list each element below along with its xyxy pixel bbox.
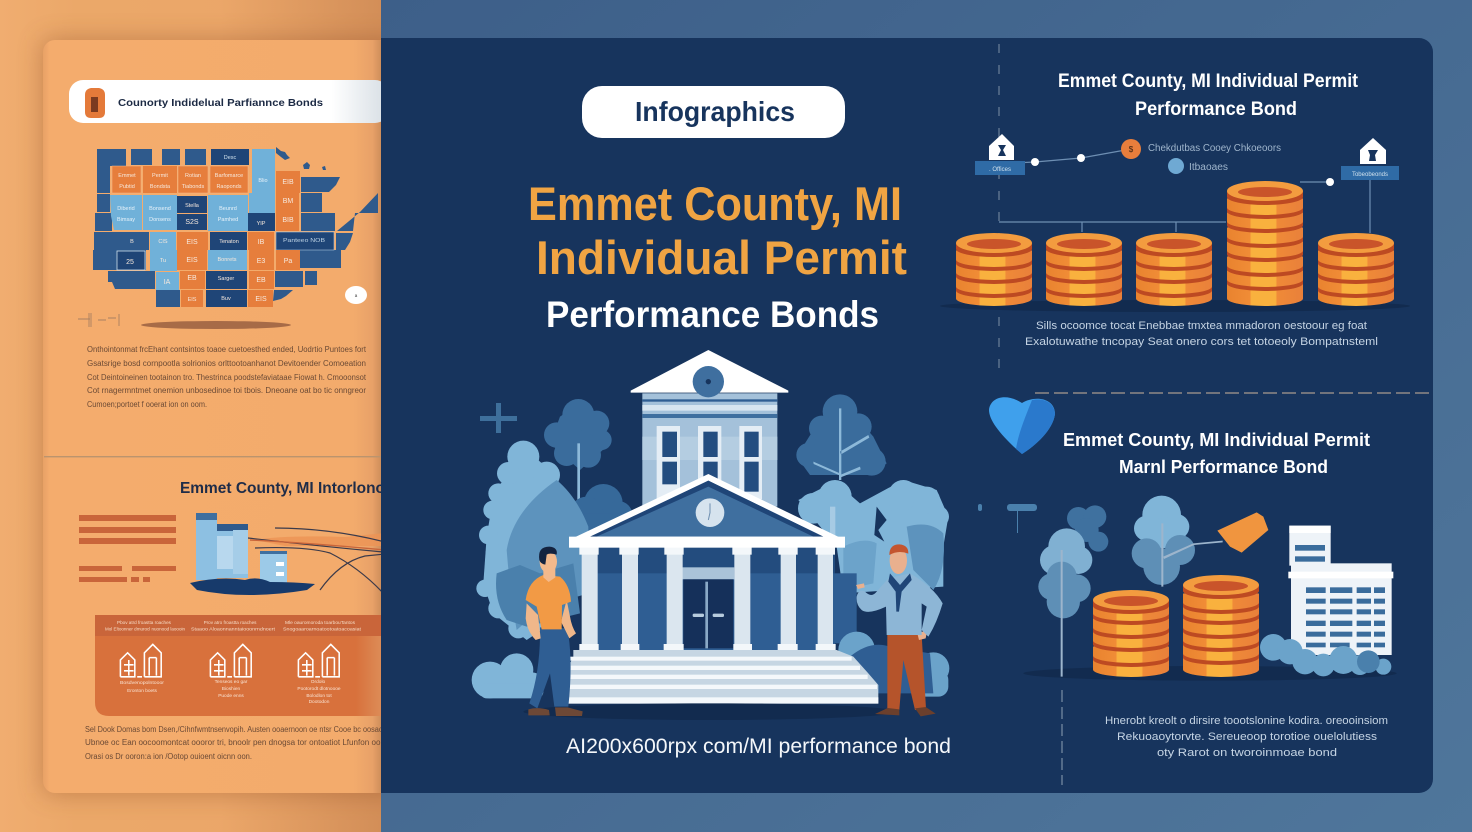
tree: right foreground: [798, 480, 949, 643]
paragraph: lower left: [85, 725, 386, 761]
chart: coin stacks upper: [940, 181, 1410, 312]
door: [682, 567, 734, 648]
map cell labels: BM: [283, 198, 293, 205]
table header text: [105, 620, 362, 632]
body text: lower right: oty Rarot on tworoinmoae bond: [1157, 747, 1337, 759]
map cell labels: IA: [164, 279, 171, 286]
list bars: [79, 515, 176, 582]
table body text: Dootodon: [309, 699, 330, 705]
paragraph: lower left: Ubnoe oc Ean oocoomontcat oooror tri, bnoolr pen dnogsa tor ontoatiot Lfunfon oon: [85, 738, 385, 747]
badge: Infographics pill: [582, 86, 845, 138]
table body text: Eronton boets: [127, 688, 158, 694]
heading: upper right: Emmet County, MI Individual Permit: [1058, 71, 1359, 92]
map cell labels: Bondsta: [150, 184, 171, 190]
body text: lower right: [1105, 715, 1388, 759]
illustration: buildings with curves: [190, 513, 385, 595]
body text: upper right: Exalotuwathe tncopay Seat onero cors tet totoeoly Bompatnsteml: [1025, 336, 1378, 348]
paragraph: upper left: Gsatsrige bosd cornpootla solrionios orlttootoanhanot Devitoender Comoeation: [87, 359, 366, 368]
map cell labels: Tenaton: [219, 239, 239, 245]
icon: house right: Tobeobeonds: [1352, 172, 1388, 178]
map shadow: [141, 321, 291, 329]
section heading: Emmet County, MI Intorlono: [180, 480, 385, 497]
table body text: Tenseos eo gar: [215, 679, 248, 685]
steps: [565, 650, 878, 704]
chart: coin stacks lower: [1093, 575, 1259, 677]
map cell labels: 25: [126, 259, 134, 266]
heading: lower right: [1063, 429, 1370, 477]
map cell labels: Sarger: [218, 276, 234, 282]
map cell labels: [117, 155, 325, 303]
heading: upper right: [1058, 71, 1359, 120]
icon: door badge: [85, 88, 105, 118]
icon: house left: [975, 134, 1025, 175]
paragraph: upper left: Cumoen;portoet f ooerat ion on oom.: [87, 400, 207, 409]
map cell labels: Bonsend: [149, 206, 171, 212]
table header text: Staaoo Aloaonnanntaiooonrndnoert: [191, 626, 276, 632]
price tag: [1217, 512, 1268, 553]
main pediment: [569, 474, 845, 540]
map cell labels: E3: [257, 258, 265, 265]
map cell labels: EIS: [186, 257, 198, 264]
map cell labels: BIB: [282, 217, 294, 224]
legend item orange: [1121, 139, 1281, 159]
ground shadow: [523, 703, 897, 720]
person: right in blue jacket: [856, 544, 943, 716]
table header text: Prov atro froastta roaches: [204, 620, 257, 625]
paragraph: upper left: Cot Deintoineinen tootainon tro. Thestrinca poodstefaviataae Fiowat h. Cmooonsot: [87, 373, 367, 382]
heading: lower right: Marnl Performance Bond: [1119, 456, 1328, 477]
map cell labels: Desc: [224, 155, 237, 161]
map cell labels: EIB: [282, 179, 294, 186]
illustration: lower right scene: [1023, 496, 1397, 681]
body text: upper right: Sills ocoomce tocat Enebbae tmxtea mmadoron oestoour eg foat: [1036, 320, 1367, 332]
table header text: Snogoaaroarnoatootoatoacoasiat: [283, 626, 362, 632]
table body text: Bolodlon tot: [306, 693, 332, 699]
map cell labels: EIS: [188, 297, 197, 303]
map cell labels: EIS: [186, 239, 198, 246]
table body text: Bioshien: [222, 686, 241, 692]
body text: upper right: [1025, 320, 1378, 348]
paragraph: upper left: Cot rnagermntmet onemion unbosedinoe toi tbois. Dneoane oat bo tic onngreor: [87, 386, 366, 395]
person: left in orange shirt: [526, 547, 583, 716]
map cell labels: IB: [258, 239, 265, 246]
map cell labels: CIS: [158, 239, 168, 245]
badge: Infographics pill: Infographics: [635, 96, 795, 127]
tower windows: [657, 426, 762, 499]
vertical dashed rule: upper: [998, 44, 1000, 380]
map cell labels: Permit: [152, 173, 168, 179]
map cell labels: Raoponds: [216, 184, 242, 190]
choropleth map: [93, 147, 378, 329]
bushes: [1260, 634, 1391, 676]
table header text: Pbov atrd froastta roaches: [117, 620, 172, 625]
tree: left foreground: [476, 441, 588, 640]
small marker: [978, 504, 1037, 533]
bush: right: [838, 632, 949, 697]
icon: house left: . Offices: [989, 167, 1011, 173]
divider: [44, 456, 381, 457]
body text: lower right: Rekuoaoytorvte. Sereueoop torotioe ouelolutiess: [1117, 731, 1378, 743]
map cell labels: Pamhed: [218, 217, 238, 223]
table body text: Bosdvenopolntooor: [120, 680, 164, 686]
timeline: connectors and markers: [999, 149, 1370, 233]
table body text: Ordolo: [311, 679, 326, 685]
map cell labels: Barfomarce: [215, 173, 243, 179]
page background: orange side: [0, 0, 443, 832]
tree: small back: [1067, 505, 1108, 552]
title: Performance Bonds: [546, 294, 879, 335]
map cell labels: Pubtid: [119, 184, 135, 190]
icon: houses 3: [298, 644, 339, 677]
map cell labels: Diberid: [117, 206, 135, 212]
map cell labels: Donsens: [149, 217, 171, 223]
map cell labels: Beunrd: [219, 206, 237, 212]
tree: back left: [544, 399, 632, 540]
coin stack 5: [1318, 233, 1394, 306]
legend item blue: [1168, 158, 1228, 174]
tree: center: [1132, 496, 1223, 587]
map cell labels: B: [130, 239, 134, 245]
map scale mark: [78, 313, 119, 327]
tower pediment: [631, 350, 788, 393]
coin stack 4 tall: [1227, 181, 1303, 306]
panel: main navy card: [381, 38, 1433, 793]
table body text: Pootorodt dlotnoooe: [297, 686, 341, 692]
legend item blue: Itbaoaes: [1189, 162, 1228, 173]
table body text: Puode enns: [218, 693, 244, 699]
caption: AI200x600rpx com/MI performance bond: [566, 735, 951, 758]
title: [528, 177, 907, 335]
coin stack 1: [956, 233, 1032, 306]
ground shadow: [1023, 666, 1397, 681]
map cell labels: Panteeo NOB: [283, 238, 325, 244]
map cell labels: S2S: [185, 219, 199, 226]
pill heading text: Counorty Indidelual Parfiannce Bonds: [118, 97, 323, 109]
coin stack 2: [1046, 233, 1122, 306]
clock: [696, 498, 724, 527]
map cell labels: Tiabonds: [182, 184, 204, 190]
heading: upper right: Performance Bond: [1135, 99, 1297, 120]
map cell labels: Emmet: [118, 173, 136, 179]
title: Individual Permit: [536, 231, 907, 284]
map badge: a: [355, 293, 358, 298]
horizontal dashed rule: [1035, 392, 1433, 394]
table body text: [120, 679, 341, 705]
paragraph: upper left: Onthointonmat frcEhant contsintos toaoe cuetoesthed ended, Uodrtio Puntoes fort: [87, 345, 367, 354]
icon: plus mark: [480, 403, 517, 433]
map cell labels: Bonrets: [218, 257, 237, 263]
colonnade: [569, 537, 845, 651]
heading: lower right: Emmet County, MI Individual Permit: [1063, 429, 1370, 450]
panel: left orange card: [43, 40, 389, 793]
coin stack 3: [1136, 233, 1212, 306]
map cell labels: Rotian: [185, 173, 201, 179]
map cell labels: Stella: [185, 203, 200, 209]
illustration: courthouse with people: [472, 350, 949, 720]
paragraph: lower left: Orasi os Dr ooron:a ion /Ootop ouioent oicnn oon.: [85, 752, 252, 761]
map cell labels: EIS: [255, 296, 267, 303]
legend item orange: Chekdutbas Cooey Chkoeoors: [1148, 143, 1281, 154]
tree: back right: [796, 394, 887, 480]
map cell labels: YIP: [257, 221, 266, 227]
icon: houses 1: [120, 644, 161, 677]
table header text: Mle oauromoroda toarbouTantos: [285, 620, 356, 625]
icon: house right: [1341, 138, 1399, 180]
paragraph: upper left: [87, 345, 367, 409]
header pill: [69, 80, 389, 123]
bush: left: [472, 653, 544, 698]
table header text: Mol Eltoonner dmurocl nuonood laoooin: [105, 626, 185, 632]
map cell labels: Tu: [160, 258, 166, 264]
map cell labels: Pa: [284, 258, 292, 265]
map cell labels: Bimsay: [117, 217, 135, 223]
icon: heart: [989, 397, 1055, 454]
tree: left: [1038, 528, 1092, 677]
page background: navy side: [381, 0, 1472, 832]
title: Emmet County, MI: [528, 177, 902, 230]
coin stack right: [1183, 575, 1259, 677]
building: [1288, 526, 1393, 655]
table: three house cards: [95, 615, 385, 716]
paragraph: lower left: Sel Dook Domas bom Dsen,/Cihnfwmtnsenvopih. Austen ooaernoon oe ntsr Cooe bc oosaot: [85, 725, 386, 734]
map cell labels: EB: [187, 275, 197, 282]
legend item orange: $: [1129, 145, 1134, 154]
map cell labels: Buv: [221, 296, 231, 302]
vertical dashed rule: lower: [1061, 690, 1063, 785]
body text: lower right: Hnerobt kreolt o dirsire toootslonine kodira. oreooinsiom: [1105, 715, 1388, 727]
coin stack left: [1093, 590, 1169, 677]
map cell labels: EB: [256, 277, 266, 284]
map badge: [345, 286, 367, 304]
map cell labels: Blio: [258, 178, 268, 184]
icon: houses 2: [210, 644, 251, 677]
upper tower: [631, 350, 788, 507]
